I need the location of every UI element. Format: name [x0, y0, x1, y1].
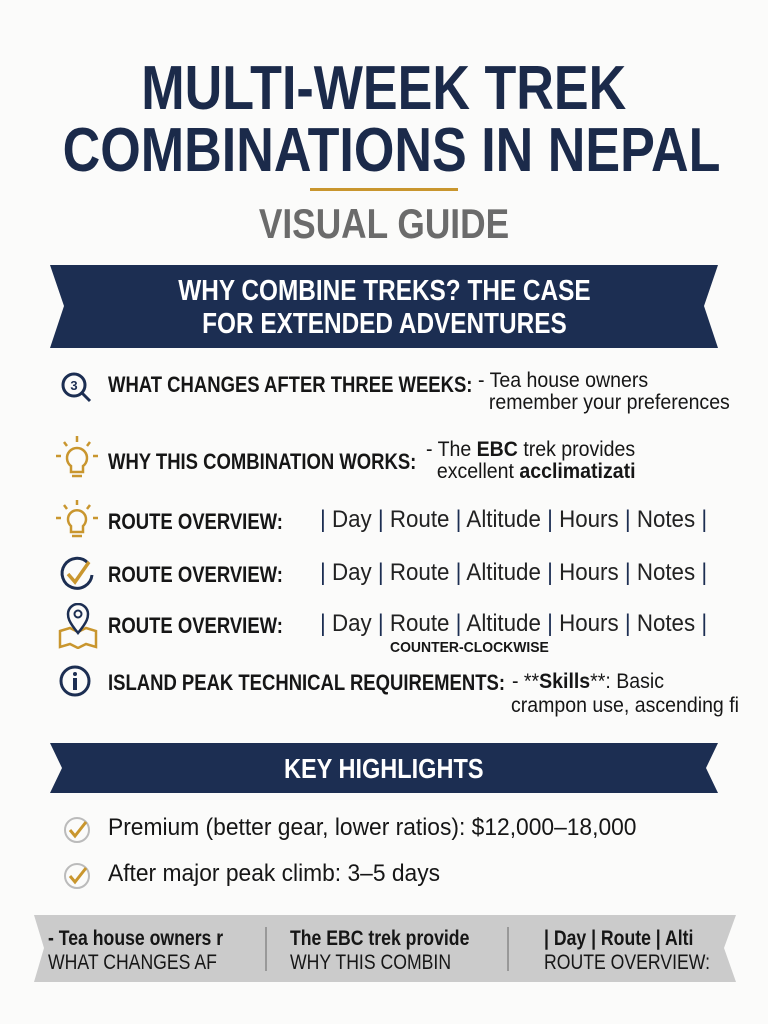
row 2: why this combination works: excellent acclimatizati	[437, 460, 636, 483]
highlight 1: Premium (better gear, lower ratios): $12,000–18,000	[108, 814, 636, 841]
icon: check	[64, 817, 90, 843]
row 1: what changes: - Tea house owners	[478, 369, 648, 392]
gold divider	[310, 188, 458, 191]
icon: check	[64, 863, 90, 889]
icon: lightbulb	[56, 436, 98, 478]
row 2: why this combination works: - The EBC trek provides	[426, 438, 635, 461]
icon: lightbulb	[56, 500, 98, 538]
row 3: route overview: | Day | Route | Altitude | Hours | Notes |	[320, 506, 707, 533]
title: COMBINATIONS IN NEPAL	[63, 116, 720, 185]
icon: info	[60, 666, 90, 696]
banner: why combine treks	[50, 265, 718, 348]
icon: magnifier: 3	[70, 378, 78, 393]
row 2: why this combination works: WHY THIS COMBINATION WORKS:	[108, 449, 416, 474]
row 1: what changes: WHAT CHANGES AFTER THREE WEEKS:	[108, 372, 472, 397]
row 6: island peak: - **Skills**: Basic	[512, 670, 664, 693]
bottom ribbon: | Day | Route | Alti	[544, 927, 693, 950]
row 5: route overview with map: ROUTE OVERVIEW:	[108, 613, 283, 638]
row 2: why this combination works	[56, 436, 636, 483]
bottom ribbon: - Tea house owners r	[48, 927, 223, 950]
icon: map pin	[58, 603, 98, 649]
row 6: island peak: crampon use, ascending fi	[511, 694, 739, 717]
row 4: route overview: ROUTE OVERVIEW:	[108, 562, 283, 587]
row 5: route overview with map: COUNTER-CLOCKWISE	[390, 639, 549, 656]
row 3: route overview	[56, 500, 707, 538]
row 1: what changes	[62, 369, 730, 414]
row 1: what changes: remember your preferences	[489, 391, 730, 414]
bottom ribbon: The EBC trek provide	[290, 927, 469, 950]
bottom ribbon: ROUTE OVERVIEW:	[544, 951, 710, 974]
row 4: route overview: | Day | Route | Altitude | Hours | Notes |	[320, 559, 707, 586]
row 6: island peak	[60, 666, 739, 717]
banner: key highlights	[50, 743, 718, 793]
icon: check circle	[60, 556, 94, 590]
row 5: route overview with map: | Day | Route | Altitude | Hours | Notes |	[320, 610, 707, 637]
icon: magnifier	[62, 372, 91, 402]
row 3: route overview: ROUTE OVERVIEW:	[108, 509, 283, 534]
subtitle: VISUAL GUIDE	[259, 200, 509, 247]
title	[63, 54, 720, 185]
banner: key highlights: KEY HIGHLIGHTS	[284, 753, 484, 784]
bottom ribbon: WHY THIS COMBIN	[290, 951, 451, 974]
title: MULTI-WEEK TREK	[141, 54, 627, 123]
row 5: route overview with map	[58, 603, 707, 656]
bottom ribbon	[34, 915, 736, 982]
row 4: route overview	[60, 556, 707, 590]
highlight 2: After major peak climb: 3–5 days	[108, 860, 440, 887]
bottom ribbon: WHAT CHANGES AF	[48, 951, 217, 974]
row 6: island peak: ISLAND PEAK TECHNICAL REQUIREMENTS:	[108, 670, 505, 695]
banner: why combine treks: FOR EXTENDED ADVENTURES	[202, 308, 566, 340]
banner: why combine treks: WHY COMBINE TREKS? THE CASE	[178, 275, 590, 307]
